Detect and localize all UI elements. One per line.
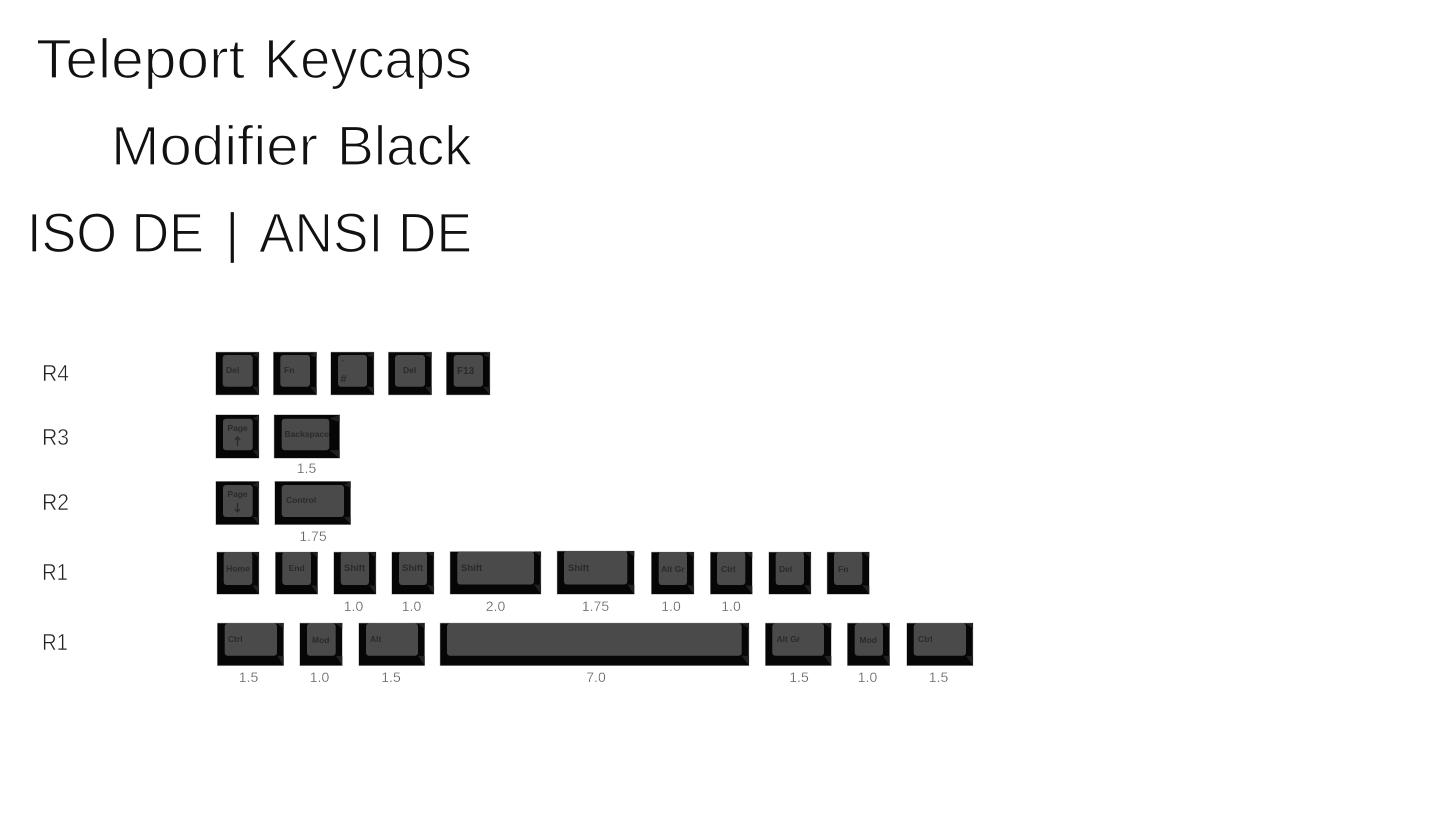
- row labels: R3: [42, 424, 69, 450]
- key width labels: 1.5: [297, 460, 316, 476]
- key: Del: [769, 552, 811, 594]
- key: Ctrl: Ctrl: [918, 634, 933, 644]
- row labels: R2: [42, 489, 69, 515]
- key width labels: 1.0: [402, 598, 421, 614]
- title: Modifier: [111, 114, 318, 177]
- row labels: R4: [42, 360, 69, 386]
- key width labels: 1.75: [582, 598, 609, 614]
- title: Teleport: [36, 27, 245, 90]
- key: Mod: Mod: [860, 635, 877, 645]
- key: Ctrl: [710, 552, 752, 594]
- key width labels: 1.0: [344, 598, 363, 614]
- key: Fn: [827, 552, 869, 594]
- key: Fn: Fn: [284, 365, 294, 375]
- key: number sign: ': [342, 360, 344, 367]
- key: Shift: Shift: [344, 563, 366, 574]
- key: Shift: [392, 552, 434, 594]
- key: number sign: [331, 352, 374, 395]
- key: Shift: Shift: [402, 563, 424, 574]
- key: Page up: Page: [227, 423, 248, 433]
- key: F13: F13: [457, 366, 475, 377]
- row labels: [42, 360, 69, 655]
- key: Fn: [273, 352, 317, 395]
- key: Shift 1.75: [557, 551, 634, 594]
- key width labels: 1.0: [721, 598, 741, 614]
- key: Backspace: Backspace: [284, 429, 329, 439]
- key width labels: 1.0: [661, 598, 681, 614]
- title: |: [225, 201, 240, 264]
- key: Space: [440, 623, 749, 666]
- key: Alt Gr: Alt Gr: [776, 634, 801, 644]
- key: Page down: Page: [227, 489, 248, 499]
- row labels: R1: [42, 629, 68, 655]
- row R4 keys: [216, 352, 490, 395]
- key width labels: 1.5: [239, 669, 258, 685]
- title: ANSI DE: [259, 201, 472, 264]
- key: Del: Del: [403, 365, 416, 375]
- key: Home: Home: [226, 564, 250, 574]
- key width labels: [239, 460, 948, 685]
- title: [27, 27, 473, 264]
- key: Ctrl: Ctrl: [721, 564, 736, 574]
- key: Shift 2.0: Shift: [461, 563, 483, 574]
- key width labels: 2.0: [486, 598, 505, 614]
- key: Mod: [847, 623, 890, 666]
- key: Del: Del: [779, 564, 792, 574]
- key: Del: Del: [226, 365, 239, 375]
- row R2 keys: [216, 481, 351, 525]
- row R1 lower keys: [217, 623, 973, 666]
- key: Alt Gr: [765, 623, 831, 666]
- row R1 upper keys: [217, 551, 869, 594]
- key: End: [275, 552, 318, 594]
- key: Fn: Fn: [838, 564, 848, 574]
- row labels: R1: [42, 559, 68, 585]
- key: Ctrl: Ctrl: [228, 634, 243, 644]
- key: Alt Gr: [651, 552, 694, 594]
- key: Alt: [359, 623, 425, 666]
- key width labels: 1.5: [381, 669, 401, 685]
- key: Mod: Mod: [312, 635, 329, 645]
- key: F13: [446, 352, 490, 395]
- key: Del: [388, 352, 432, 395]
- key width labels: 1.0: [310, 669, 329, 685]
- key width labels: 7.0: [586, 669, 606, 685]
- title: ISO DE: [27, 201, 204, 264]
- key width labels: 1.5: [929, 669, 948, 685]
- title: Black: [337, 114, 473, 177]
- key width labels: 1.75: [299, 528, 327, 544]
- key: Del: [216, 352, 259, 395]
- key: Home: [217, 552, 259, 594]
- key: Ctrl: [217, 623, 284, 666]
- key: Mod: [300, 623, 342, 666]
- key width labels: 1.0: [858, 669, 877, 685]
- key: number sign: #: [340, 374, 347, 386]
- key: Control: Control: [286, 495, 316, 505]
- key: Shift 1.75: Shift: [568, 563, 590, 574]
- row R3 keys: [216, 415, 340, 458]
- key: End: End: [289, 563, 305, 573]
- key: Ctrl: [907, 623, 973, 666]
- key: Shift 2.0: [450, 552, 541, 594]
- key: Shift: [334, 552, 376, 594]
- key: Alt Gr: Alt Gr: [661, 564, 685, 574]
- key: Alt: Alt: [370, 634, 382, 644]
- title: Keycaps: [264, 27, 472, 90]
- key width labels: 1.5: [789, 669, 809, 685]
